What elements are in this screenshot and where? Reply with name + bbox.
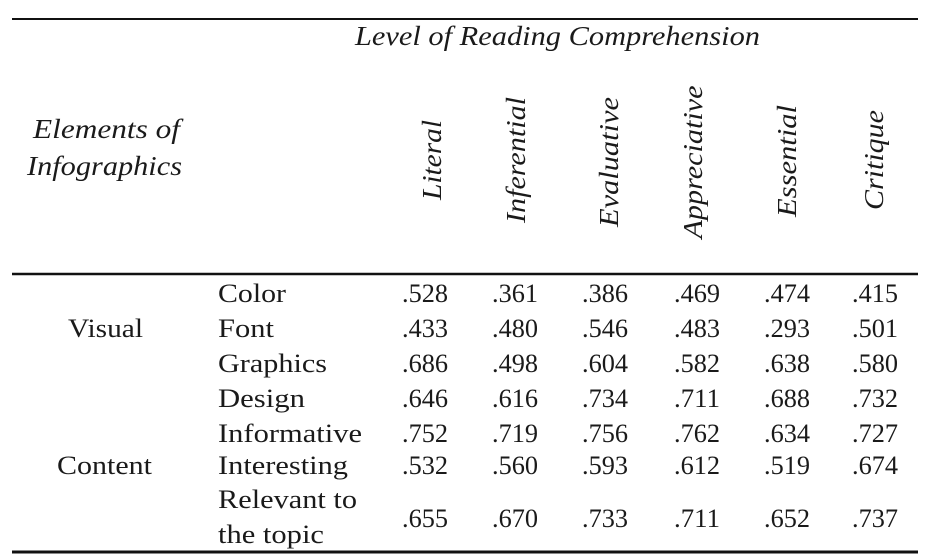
data values: .674: [852, 451, 898, 480]
data values: .737: [852, 504, 898, 533]
element labels: Color: [218, 279, 286, 308]
data values: .469: [674, 279, 720, 308]
data values: .646: [402, 384, 448, 413]
column headers (rotated): [417, 85, 889, 241]
data values: .638: [764, 349, 810, 378]
row header label: elements of infographics: [26, 114, 184, 181]
data values: .474: [764, 279, 810, 308]
data values: .634: [764, 419, 810, 448]
data values: .498: [492, 349, 538, 378]
element labels: the topic: [218, 520, 324, 549]
data values: .483: [674, 314, 720, 343]
element labels: Relevant to: [218, 485, 357, 514]
data values: .616: [492, 384, 538, 413]
data values: .688: [764, 384, 810, 413]
element labels: Font: [218, 314, 275, 343]
data values: .560: [492, 451, 538, 480]
data values: .686: [402, 349, 448, 378]
data values: .415: [852, 279, 898, 308]
element labels: Interesting: [218, 451, 348, 480]
data values: .519: [764, 451, 810, 480]
element labels: Graphics: [218, 349, 327, 378]
group labels: Visual: [68, 314, 143, 343]
row header label: elements of infographics: Elements of: [32, 114, 184, 144]
data values: .582: [674, 349, 720, 378]
data values: .293: [764, 314, 810, 343]
data values: .655: [402, 504, 448, 533]
data values: .711: [674, 504, 720, 533]
data values: .762: [674, 419, 720, 448]
data values: .711: [674, 384, 720, 413]
data values: .532: [402, 451, 448, 480]
column headers (rotated): Inferential: [501, 97, 531, 224]
element labels: Design: [218, 384, 305, 413]
data values: .612: [674, 451, 720, 480]
data values: .604: [582, 349, 628, 378]
column headers (rotated): Appreciative: [678, 85, 708, 241]
group labels: [57, 314, 153, 480]
column headers (rotated): Literal: [417, 120, 447, 201]
data values: .361: [492, 279, 538, 308]
data values: .501: [852, 314, 898, 343]
element labels: Informative: [218, 419, 362, 448]
column headers (rotated): Evaluative: [594, 97, 624, 228]
data values: .480: [492, 314, 538, 343]
title: level of reading comprehension: Level of Reading Comprehension: [354, 21, 760, 51]
data values: .652: [764, 504, 810, 533]
data values: .756: [582, 419, 628, 448]
data values: .593: [582, 451, 628, 480]
row header label: elements of infographics: Infographics: [26, 151, 182, 181]
data values: .670: [492, 504, 538, 533]
data values: .752: [402, 419, 448, 448]
data values: .433: [402, 314, 448, 343]
data values: .727: [852, 419, 898, 448]
data values: .732: [852, 384, 898, 413]
data values: .719: [492, 419, 538, 448]
data values: .580: [852, 349, 898, 378]
data values: .386: [582, 279, 628, 308]
element labels: [218, 279, 362, 549]
column headers (rotated): Critique: [859, 110, 889, 210]
column headers (rotated): Essential: [772, 105, 802, 218]
data values: [402, 279, 898, 533]
group labels: Content: [57, 451, 153, 480]
data values: .733: [582, 504, 628, 533]
data values: .546: [582, 314, 628, 343]
data values: .528: [402, 279, 448, 308]
data values: .734: [582, 384, 628, 413]
